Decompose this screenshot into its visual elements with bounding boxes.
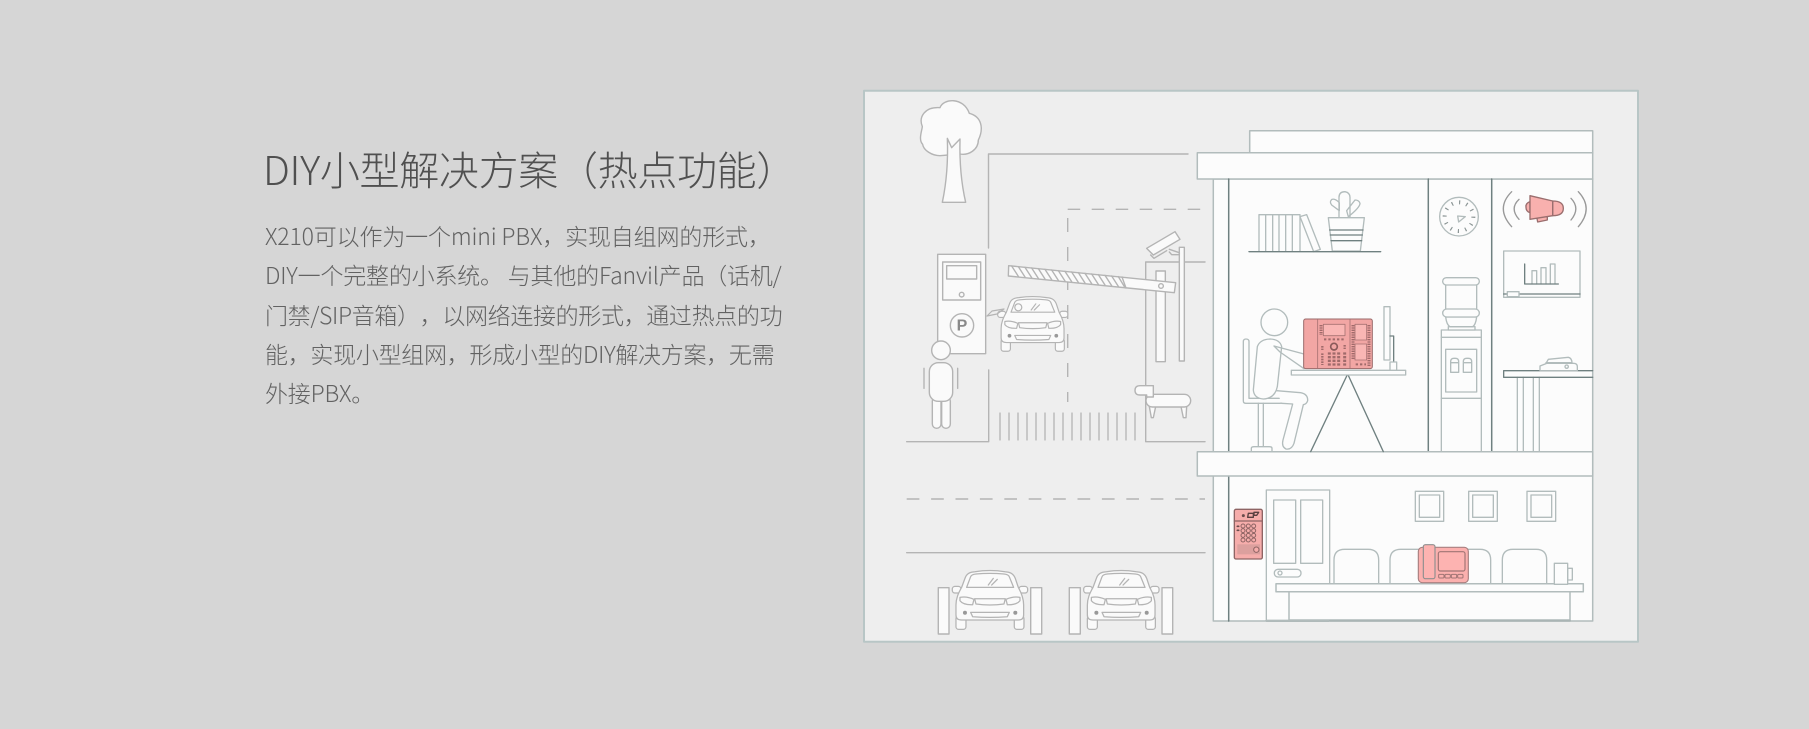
outdoor road and wall lines (907, 154, 1205, 553)
security camera (1147, 232, 1180, 258)
seated person (1243, 309, 1308, 452)
icon: IP desk phone (highlighted) (1304, 319, 1372, 369)
barrier gate (1008, 247, 1184, 362)
parking machine: P (957, 318, 968, 335)
barrier base (1135, 386, 1191, 418)
text block: description (265, 218, 782, 409)
icon: reception phone (highlighted) (1418, 545, 1468, 583)
picture frames (1415, 491, 1556, 521)
tree (920, 101, 981, 202)
parked cars (938, 571, 1173, 634)
water cooler (1441, 278, 1481, 452)
parking machine (938, 254, 986, 354)
building shell (1197, 131, 1593, 621)
text block: description: DIY一个完整的小系统。 与其他的Fanvil产品（话机/ (265, 257, 782, 291)
title: DIY小型解决方案（热点功能） (263, 139, 796, 197)
side table with telephone (1504, 357, 1593, 452)
crosswalk stripes (1000, 413, 1135, 440)
shelf with books and plant (1249, 192, 1381, 252)
waiting chairs (1334, 549, 1547, 584)
person standing (924, 341, 958, 428)
icon: door intercom (highlighted) (1234, 509, 1262, 559)
text block: description: X210可以作为一个mini PBX，实现自组网的形式， (265, 218, 771, 252)
text block: description: 能，实现小型组网，形成小型的DIY解决方案，无需 (265, 336, 774, 370)
reception counter (1276, 584, 1583, 621)
icon: mug (1554, 563, 1572, 584)
text block: description: 外接PBX。 (265, 375, 374, 409)
icon: wall clock (1440, 197, 1478, 236)
door (1266, 490, 1330, 620)
whiteboard chart (1504, 251, 1580, 297)
entrance car (987, 297, 1068, 351)
icon: megaphone (highlighted) (1503, 192, 1586, 227)
text block: description: 门禁/SIP音箱），以网络连接的形式，通过热点的功 (265, 297, 782, 331)
desk with monitor (1291, 307, 1406, 452)
